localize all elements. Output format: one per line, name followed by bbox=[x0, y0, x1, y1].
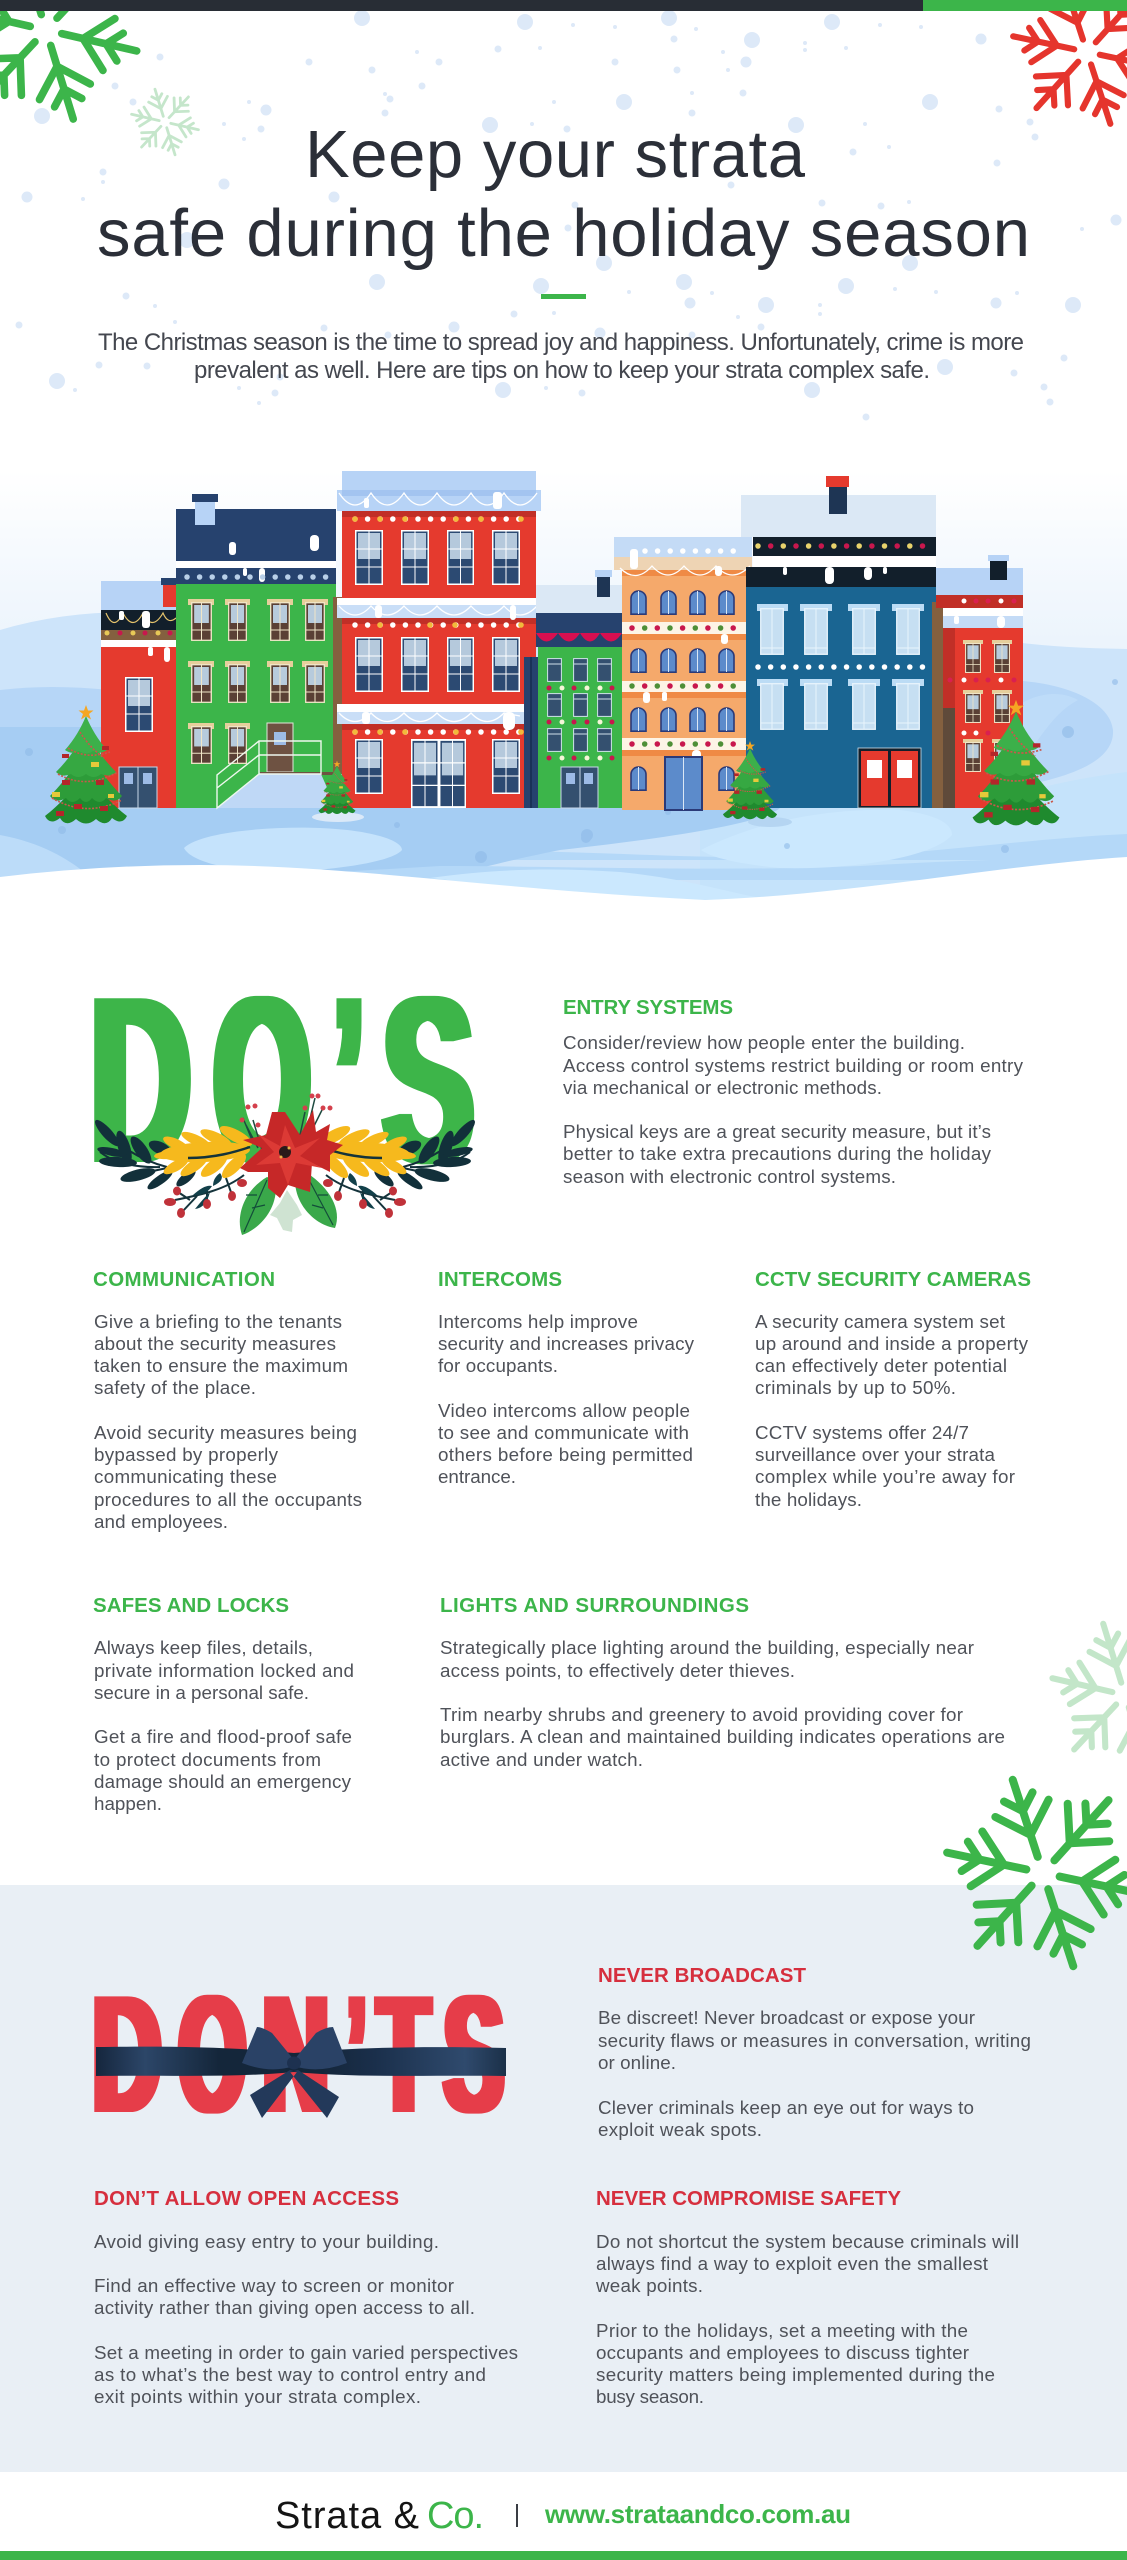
heading: DO'S: S bbox=[383, 948, 473, 1214]
block: safes and locks: Get a fire and flood-proof safe bbox=[94, 1726, 352, 1747]
logo: Strata & bbox=[275, 2495, 419, 2537]
block: never compromise safety bbox=[595, 2187, 1019, 2407]
title: safe during the holiday season bbox=[97, 196, 1030, 271]
block: intercoms: for occupants. bbox=[438, 1355, 558, 1376]
block: communication: about the security measures bbox=[94, 1333, 336, 1354]
block: never compromise safety: weak points. bbox=[595, 2275, 703, 2296]
block: entry systems: better to take extra precautions during the holiday bbox=[563, 1143, 992, 1164]
block: communication: and employees. bbox=[94, 1511, 228, 1532]
section: do's lettering and wreath bbox=[91, 947, 478, 1235]
tree: left large bbox=[45, 705, 127, 824]
heading: DO'S: ’ bbox=[336, 947, 362, 1213]
block: never compromise safety: occupants and employees to discuss tighter bbox=[596, 2342, 969, 2363]
panel: don'ts bbox=[0, 1885, 1127, 2472]
heading: DON'TS with ribbon: O bbox=[179, 1961, 246, 2149]
block: entry systems: season with electronic control systems. bbox=[563, 1166, 896, 1187]
intro text bbox=[98, 329, 1024, 384]
building: right red bbox=[932, 555, 1023, 808]
block: safes and locks: Always keep files, details, bbox=[94, 1637, 313, 1658]
title: Keep your strata bbox=[305, 117, 806, 192]
block: never broadcast: exploit weak spots. bbox=[598, 2119, 762, 2140]
block: never broadcast: security flaws or measures in conversation, writing bbox=[598, 2030, 1031, 2051]
building: tall red bbox=[333, 471, 541, 808]
block: cctv security cameras: surveillance over your strata bbox=[755, 1444, 996, 1465]
block: don't allow open access: as to what’s the best way to control entry and bbox=[94, 2364, 486, 2385]
block: communication: COMMUNICATION bbox=[93, 1268, 275, 1291]
heading: DO'S bbox=[91, 947, 473, 1214]
heading: DON'TS with ribbon: D bbox=[93, 1960, 161, 2148]
block: cctv security cameras: the holidays. bbox=[755, 1489, 862, 1510]
block: communication: communicating these bbox=[94, 1466, 277, 1487]
block: intercoms: others before being permitted bbox=[438, 1444, 693, 1465]
snowflake: right pale green bbox=[1031, 1602, 1127, 1788]
tree: right large bbox=[973, 700, 1059, 825]
block: never compromise safety: busy season. bbox=[596, 2386, 704, 2407]
logo bbox=[275, 2495, 484, 2537]
block: communication: procedures to all the occupants bbox=[94, 1489, 362, 1510]
block: entry systems: Consider/review how people enter the building. bbox=[563, 1032, 965, 1053]
logo: Co. bbox=[427, 2495, 484, 2537]
heading: DON'TS with ribbon: N bbox=[263, 1960, 329, 2148]
building: left red bbox=[101, 578, 176, 808]
block: communication: safety of the place. bbox=[94, 1377, 256, 1398]
block: lights and surroundings: Strategically place lighting around the building, especially near bbox=[440, 1637, 974, 1658]
website: www.strataandco.com.au bbox=[544, 2499, 851, 2529]
block: entry systems: Access control systems restrict building or room entry bbox=[563, 1055, 1024, 1076]
block: never broadcast: NEVER BROADCAST bbox=[598, 1964, 806, 1987]
block: safes and locks: to protect documents from bbox=[94, 1749, 321, 1770]
snow hills background bbox=[0, 470, 1127, 960]
building: green with navy roof bbox=[176, 494, 336, 808]
building: blue bbox=[741, 476, 936, 808]
falling snow dots bbox=[19, 18, 1116, 417]
block: lights and surroundings: burglars. A clean and maintained building indicates operations are bbox=[440, 1726, 1005, 1747]
block: cctv security cameras: up around and inside a property bbox=[755, 1333, 1029, 1354]
block: communication bbox=[93, 1268, 362, 1532]
block: don't allow open access bbox=[94, 2187, 518, 2407]
block: cctv security cameras: A security camera system set bbox=[755, 1311, 1006, 1332]
intro text: prevalent as well. Here are tips on how to keep your strata complex safe. bbox=[194, 357, 930, 384]
block: never compromise safety: NEVER COMPROMISE SAFETY bbox=[596, 2187, 901, 2210]
block: intercoms: Video intercoms allow people bbox=[438, 1400, 690, 1421]
block: intercoms: INTERCOMS bbox=[438, 1268, 562, 1291]
snowflake: top left green bbox=[0, 0, 163, 146]
building: orange bbox=[614, 537, 752, 810]
block: lights and surroundings: Trim nearby shrubs and greenery to avoid providing cover for bbox=[440, 1704, 963, 1725]
block: intercoms: security and increases privacy bbox=[438, 1333, 695, 1354]
block: lights and surroundings: active and under watch. bbox=[440, 1749, 643, 1770]
block: don't allow open access: exit points within your strata complex. bbox=[94, 2386, 421, 2407]
block: lights and surroundings bbox=[440, 1594, 1005, 1770]
block: cctv security cameras: CCTV systems offer 24/7 bbox=[755, 1422, 969, 1443]
block: communication: bypassed by properly bbox=[94, 1444, 279, 1465]
block: don't allow open access: Find an effective way to screen or monitor bbox=[94, 2275, 454, 2296]
title accent bar bbox=[541, 294, 586, 299]
snowflake: large green bbox=[919, 1749, 1127, 1997]
block: safes and locks: secure in a personal safe. bbox=[94, 1682, 309, 1703]
block: never compromise safety: always find a way to exploit even the smallest bbox=[596, 2253, 989, 2274]
block: don't allow open access: Set a meeting in order to gain varied perspectives bbox=[94, 2342, 518, 2363]
tree: medium bbox=[723, 741, 792, 827]
block: safes and locks: private information locked and bbox=[94, 1660, 354, 1681]
block: never broadcast: or online. bbox=[598, 2052, 676, 2073]
block: safes and locks bbox=[93, 1594, 354, 1814]
block: never broadcast: Clever criminals keep an eye out for ways to bbox=[598, 2097, 974, 2118]
block: don't allow open access: Avoid giving easy entry to your building. bbox=[94, 2231, 439, 2252]
block: lights and surroundings: access points, to effectively deter thieves. bbox=[440, 1660, 795, 1681]
block: intercoms bbox=[438, 1268, 695, 1487]
title bbox=[97, 117, 1030, 271]
block: communication: Avoid security measures being bbox=[94, 1422, 357, 1443]
block: never broadcast: Be discreet! Never broadcast or expose your bbox=[598, 2007, 975, 2028]
block: don't allow open access: activity rather than giving open access to all. bbox=[94, 2297, 475, 2318]
block: intercoms: Intercoms help improve bbox=[438, 1311, 638, 1332]
heading: DON'TS with ribbon: ’ bbox=[350, 1961, 364, 2149]
block: cctv security cameras: can effectively deter potential bbox=[755, 1355, 1007, 1376]
block: never compromise safety: Do not shortcut the system because criminals will bbox=[596, 2231, 1019, 2252]
block: don't allow open access: DON’T ALLOW OPEN ACCESS bbox=[94, 2187, 399, 2210]
tree: small snow mound bbox=[312, 761, 364, 822]
heading: DON'TS with ribbon: T bbox=[378, 1961, 429, 2149]
block: entry systems: via mechanical or electronic methods. bbox=[563, 1077, 882, 1098]
building: small green with scallops bbox=[536, 570, 622, 808]
footer bbox=[0, 2495, 1127, 2560]
top bar bbox=[0, 0, 1127, 11]
block: safes and locks: damage should an emergency bbox=[94, 1771, 352, 1792]
block: lights and surroundings: LIGHTS AND SURROUNDINGS bbox=[440, 1594, 749, 1617]
heading: DO'S: O bbox=[214, 947, 310, 1213]
heading: DON'TS with ribbon: S bbox=[444, 1961, 503, 2148]
block: never compromise safety: Prior to the holidays, set a meeting with the bbox=[596, 2320, 968, 2341]
block: entry systems bbox=[563, 996, 1024, 1187]
block: cctv security cameras bbox=[755, 1268, 1031, 1510]
block: never broadcast bbox=[598, 1964, 1031, 2140]
block: cctv security cameras: complex while you’re away for bbox=[755, 1466, 1015, 1487]
heading: DON'TS with ribbon bbox=[93, 1960, 506, 2149]
block: cctv security cameras: criminals by up to 50%. bbox=[755, 1377, 956, 1398]
bottom bar bbox=[0, 2551, 1127, 2560]
block: cctv security cameras: CCTV SECURITY CAMERAS bbox=[755, 1268, 1031, 1291]
block: communication: taken to ensure the maximum bbox=[94, 1355, 348, 1376]
block: safes and locks: happen. bbox=[94, 1793, 162, 1814]
snowflake: pale green bbox=[122, 79, 208, 165]
block: communication: Give a briefing to the tenants bbox=[94, 1311, 342, 1332]
block: entry systems: ENTRY SYSTEMS bbox=[563, 996, 733, 1019]
block: never compromise safety: security matters being implemented during the bbox=[596, 2364, 995, 2385]
illustration: snowy street bbox=[0, 470, 1127, 960]
snowflake: top right red bbox=[991, 0, 1127, 147]
block: intercoms: entrance. bbox=[438, 1466, 516, 1487]
ribbon and bow bbox=[96, 2027, 506, 2118]
block: intercoms: to see and communicate with bbox=[438, 1422, 689, 1443]
block: safes and locks: SAFES AND LOCKS bbox=[93, 1594, 289, 1617]
heading: DO'S: D bbox=[91, 948, 191, 1213]
intro text: The Christmas season is the time to spread joy and happiness. Unfortunately, crime is more bbox=[98, 329, 1024, 356]
wreath: poinsettia and foliage bbox=[92, 1094, 478, 1235]
separator bbox=[516, 2504, 518, 2527]
block: entry systems: Physical keys are a great security measure, but it’s bbox=[563, 1121, 991, 1142]
